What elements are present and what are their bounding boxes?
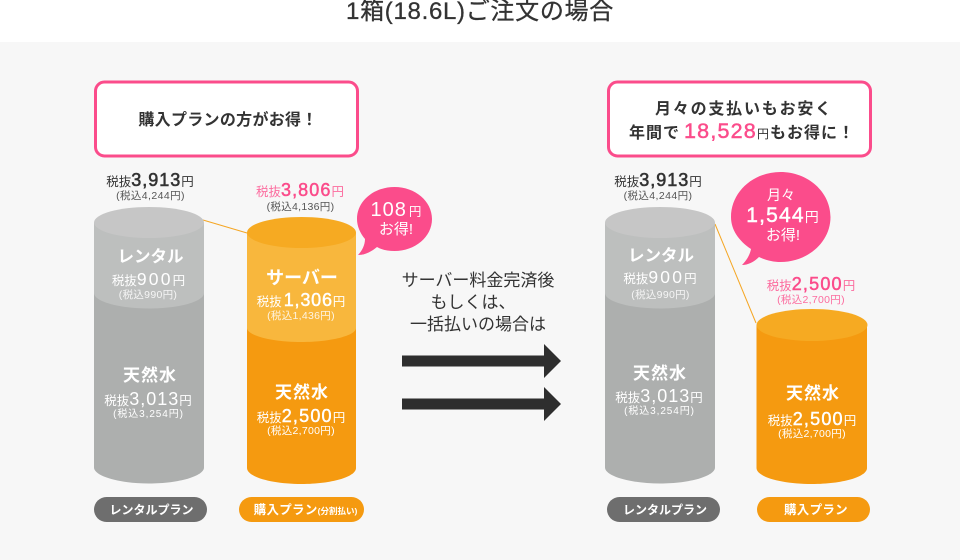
server label: 税抜1,306円 xyxy=(257,290,345,310)
total price: purchase left: 税抜3,806円 xyxy=(256,180,344,200)
callout: monthly and yearly savings: 月々の支払いもお安く xyxy=(655,99,833,118)
rental label: (税込990円) xyxy=(631,288,690,301)
cylinder: purchase plan right xyxy=(756,309,868,484)
total price: purchase right: (税込2,700円) xyxy=(777,293,845,306)
speech bubble: 1,544 yen saved monthly: お得! xyxy=(766,227,800,244)
total price: rental left: (税込4,244円) xyxy=(116,189,185,202)
total price: purchase right xyxy=(767,274,855,306)
water label: (税込3,254円) xyxy=(113,407,184,420)
arrow: top xyxy=(402,344,561,378)
speech bubble: 108 yen saved xyxy=(357,187,432,255)
water label xyxy=(615,363,703,417)
water label: 天然水 xyxy=(786,383,840,403)
arrow: bottom xyxy=(402,387,561,421)
cylinder: purchase plan with server fee xyxy=(247,217,356,484)
plan label: rental right: レンタルプラン xyxy=(623,503,707,517)
plan label: rental left xyxy=(94,497,207,522)
water label: 税抜3,013円 xyxy=(615,386,703,406)
plan label: rental right xyxy=(607,497,720,522)
water label: 天然水 xyxy=(275,382,329,402)
explanation text: 一括払いの場合は xyxy=(410,315,546,334)
total price: purchase left: (税込4,136円) xyxy=(267,200,334,213)
water label: 税抜2,500円 xyxy=(768,409,856,429)
connector line: left xyxy=(203,220,247,233)
speech bubble: 1,544 yen saved monthly: 1,544円 xyxy=(746,204,819,227)
water label: 天然水 xyxy=(123,365,177,385)
explanation text: サーバー料金完済後 xyxy=(402,271,554,290)
cylinder: rental plan left xyxy=(94,207,204,484)
plan label: purchase installment xyxy=(239,497,364,522)
speech bubble: 1,544 yen saved monthly: 月々 xyxy=(767,187,795,203)
water label: 税抜3,013円 xyxy=(104,389,192,409)
speech bubble: 108 yen saved: 108円 xyxy=(371,199,421,221)
plan label: purchase right xyxy=(757,497,870,522)
water label xyxy=(104,365,192,420)
rental label: (税込990円) xyxy=(119,288,177,301)
callout: purchase plan is cheaper: 購入プランの方がお得！ xyxy=(138,110,318,129)
total price: rental left xyxy=(106,170,194,202)
total price: rental right: 税抜3,913円 xyxy=(614,170,702,190)
water label: (税込2,700円) xyxy=(778,427,846,440)
cylinder: rental plan right xyxy=(605,207,715,484)
total price: rental right: (税込4,244円) xyxy=(624,189,692,202)
rental label xyxy=(623,246,697,301)
total price: rental right xyxy=(614,170,702,202)
callout: monthly and yearly savings: 年間で18,528円もお得に！ xyxy=(629,119,855,143)
plan label: rental left: レンタルプラン xyxy=(109,503,194,517)
server label xyxy=(257,268,345,322)
total price: rental left: 税抜3,913円 xyxy=(106,170,194,190)
explanation text xyxy=(402,271,554,334)
explanation text: もしくは、 xyxy=(430,293,516,312)
speech bubble: 1,544 yen saved monthly xyxy=(731,172,830,265)
total price: purchase left xyxy=(256,180,344,213)
plan label: purchase right: 購入プラン xyxy=(784,502,848,517)
water label: (税込3,254円) xyxy=(624,404,695,417)
server label: サーバー xyxy=(266,268,338,288)
water label: (税込2,700円) xyxy=(267,424,335,437)
total price: purchase right: 税抜2,500円 xyxy=(767,274,855,294)
rental label: 税抜900円 xyxy=(112,269,185,289)
rental label: 税抜900円 xyxy=(623,267,697,287)
callout: purchase plan is cheaper xyxy=(96,82,358,156)
speech bubble: 108 yen saved: お得! xyxy=(379,221,413,238)
server label: (税込1,436円) xyxy=(267,309,335,322)
rental label: レンタル xyxy=(628,246,694,265)
callout: monthly and yearly savings xyxy=(608,82,870,156)
rental label xyxy=(112,247,185,301)
rental label: レンタル xyxy=(118,247,184,266)
connector line: right xyxy=(715,224,756,323)
water label: 天然水 xyxy=(633,363,687,383)
water label: 税抜2,500円 xyxy=(257,406,345,426)
water label xyxy=(257,382,345,437)
water label xyxy=(768,383,856,440)
plan label: purchase installment: 購入プラン(分割払い) xyxy=(254,502,358,517)
